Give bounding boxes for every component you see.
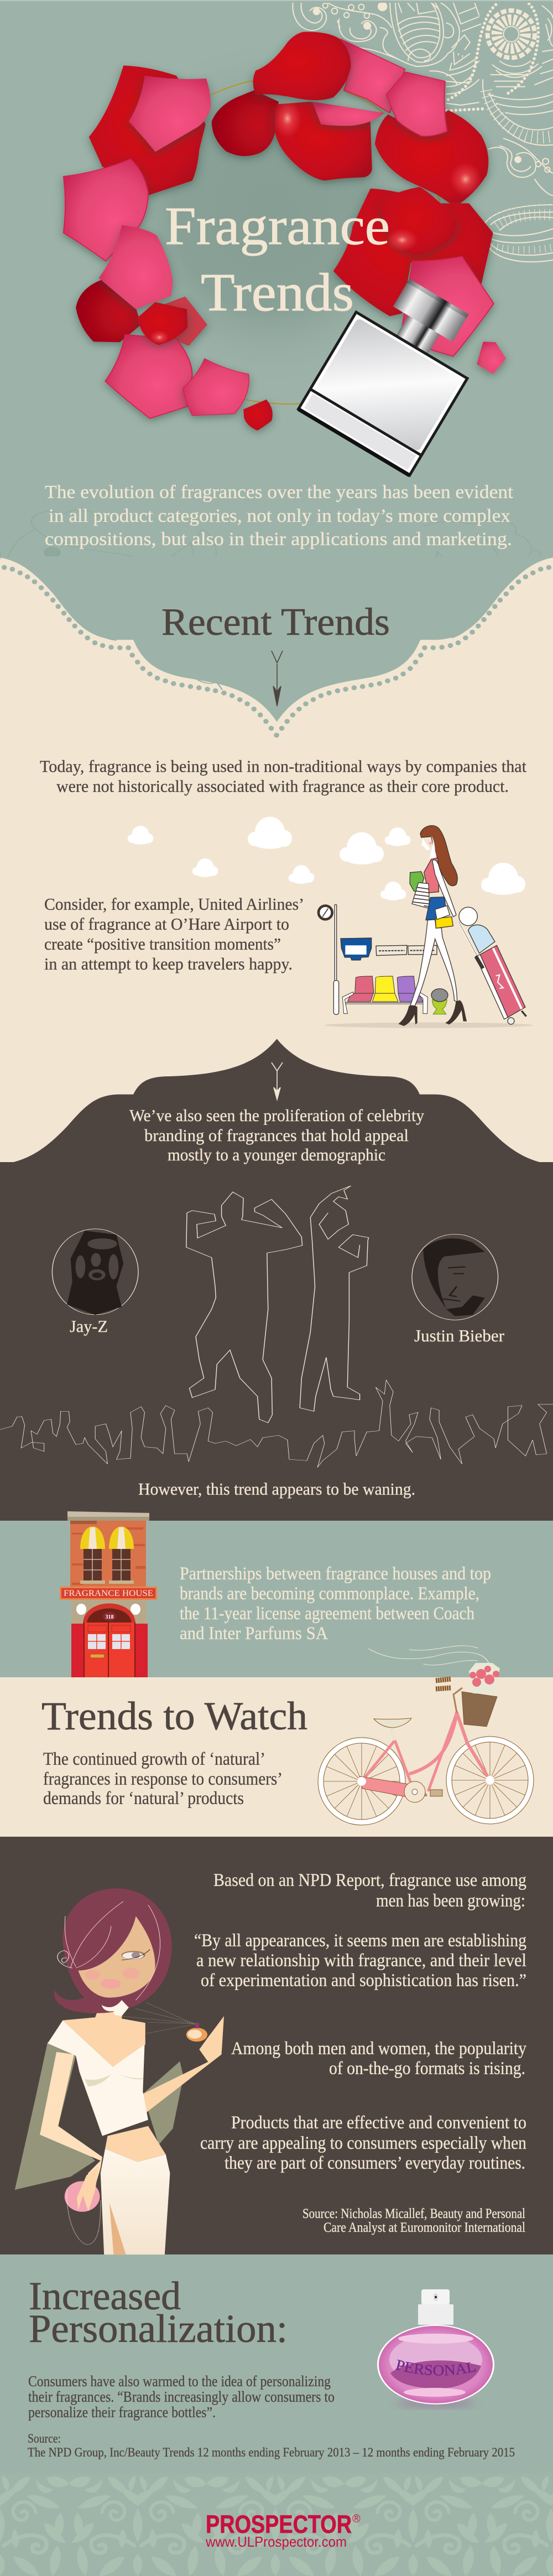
illustration: fragrance house	[60, 1511, 157, 1677]
petal: red right	[375, 110, 488, 206]
teal scalloped edge over cream	[0, 556, 553, 738]
skirt	[101, 2149, 170, 2254]
petal: pink lower right	[402, 256, 494, 356]
text: NPD report: men has been growing:	[376, 1891, 525, 1911]
flowers	[469, 1663, 500, 1694]
intro text: in all product categories, not only in today’s more complex	[49, 506, 510, 526]
petal: red top	[253, 32, 351, 100]
text: personalization: personalize their fragrance bottles”.	[28, 2404, 216, 2420]
petal: large red centre	[275, 102, 372, 181]
portrait: Jay-Z	[52, 1229, 138, 1315]
heading: Trends to Watch: Trends to Watch	[41, 1694, 307, 1738]
dotted border	[2, 565, 279, 738]
illustration: personal perfume bottle	[377, 2289, 494, 2410]
plant	[431, 989, 448, 1014]
airport clock and pole	[317, 905, 339, 1014]
text: men quote	[194, 1931, 526, 1991]
petal: dark red lower left	[76, 279, 141, 342]
background: teal hero	[0, 0, 553, 730]
dancer right	[300, 1186, 369, 1411]
text: source Micallef: Care Analyst at Euromonitor International	[324, 2220, 525, 2235]
arm	[432, 860, 456, 917]
text: source NPD	[28, 2432, 515, 2459]
text: partnerships	[180, 1564, 491, 1644]
eye	[121, 1950, 150, 1960]
arm right	[143, 2016, 224, 2112]
petal: pale red lower left	[162, 297, 207, 346]
text: united airlines: use of fragrance at O’Hare Airport to	[44, 914, 289, 934]
text: partnerships: and Inter Parfums SA	[180, 1624, 328, 1644]
text: today fragrance: were not historically associated with fragrance as their core product.	[56, 776, 509, 796]
petal: pink top centre	[312, 102, 384, 126]
house sign: FRAGRANCE HOUSE	[64, 1589, 153, 1598]
background: brown report section	[0, 1837, 553, 2254]
petal: pink bottom right	[182, 359, 249, 416]
text: celebrity branding: mostly to a younger demographic	[168, 1145, 385, 1164]
arm left	[40, 2052, 102, 2210]
petal: pink right	[386, 72, 447, 136]
text: source NPD: The NPD Group, Inc/Beauty Trends 12 months ending February 2013 – 12 months ending February 2015	[28, 2445, 515, 2459]
text: united airlines	[44, 894, 304, 973]
celebrity names: Jay-Z	[70, 1316, 108, 1336]
torso skin	[63, 2003, 145, 2067]
petal: pink top	[340, 39, 405, 113]
text: effective products: they are part of consumers’ everyday routines.	[225, 2153, 525, 2173]
text: natural fragrances: demands for ‘natural’ products	[43, 1789, 244, 1808]
house sign	[60, 1587, 157, 1600]
text: natural fragrances: fragrances in response to consumers’	[43, 1769, 283, 1789]
heading: Increased Personalization	[29, 2274, 288, 2351]
perfume bottle	[299, 264, 496, 475]
text: men quote: of experimentation and sophistication has risen.”	[201, 1971, 526, 1991]
hair	[420, 826, 457, 886]
background: cream section	[0, 557, 553, 1217]
background: cream trends section	[0, 1677, 553, 1837]
rose petal wreath	[64, 32, 506, 431]
title: Fragrance	[165, 196, 390, 256]
basket	[462, 1692, 497, 1727]
crowd	[0, 1380, 553, 1468]
petal: small pink right	[477, 341, 506, 374]
text: partnerships: the 11-year license agreement between Coach	[180, 1604, 474, 1624]
frame	[362, 1713, 490, 1792]
clouds	[128, 817, 525, 900]
text: source Micallef	[302, 2206, 525, 2235]
text: celebrity branding: branding of fragrances that hold appeal	[144, 1126, 409, 1145]
perfume atomizer	[186, 2023, 207, 2041]
yellow and white bags	[435, 917, 453, 928]
signs	[376, 945, 437, 956]
text: on-the-go formats: of on-the-go formats is rising.	[329, 2059, 525, 2079]
footer damask band	[0, 2474, 553, 2576]
petal: pink lower left mid	[99, 225, 173, 309]
breeze lines	[369, 1646, 488, 1665]
dancer outlines and crowd	[0, 1186, 553, 1468]
celebrity names: Justin Bieber	[414, 1326, 505, 1345]
bench	[342, 976, 427, 1014]
petal: dark red	[212, 90, 279, 156]
text: partnerships: Partnerships between fragrance houses and top	[180, 1564, 491, 1584]
petal: pink left	[64, 159, 148, 261]
lips	[101, 1979, 121, 1989]
green bag	[410, 872, 424, 893]
intro text: The evolution of fragrances over the years has been evident	[45, 482, 514, 502]
text: effective products: carry are appealing to consumers especially when	[200, 2133, 526, 2153]
logo: Prospector: ®	[352, 2513, 361, 2525]
arrow: down cream	[272, 1062, 283, 1100]
text: personalization: their fragrances. “Brands increasingly allow consumers to	[28, 2388, 335, 2405]
petal: pink upper left	[129, 76, 211, 152]
title	[165, 196, 390, 323]
face	[79, 1916, 155, 1998]
text: celebrity branding	[129, 1106, 424, 1164]
intro text: compositions, but also in their applications and marketing.	[45, 529, 512, 550]
logo: Prospector: www.ULProspector.com	[205, 2533, 347, 2550]
departures screen	[341, 938, 372, 960]
legs	[410, 920, 457, 1006]
top	[424, 858, 439, 893]
text: united airlines: Consider, for example, United Airlines’	[44, 894, 304, 914]
heading: Increased Personalization: Increased	[29, 2274, 181, 2318]
text: trend waning: However, this trend appears to be waning.	[138, 1479, 415, 1499]
text: NPD report	[213, 1870, 526, 1911]
heading: Increased Personalization: Personalization:	[29, 2307, 288, 2351]
petal: tiny red	[243, 400, 273, 431]
text: on-the-go formats: Among both men and women, the popularity	[231, 2039, 526, 2059]
celebrity names	[70, 1316, 505, 1345]
logo: Prospector	[205, 2510, 361, 2550]
text: united airlines: create “positive transition moments”	[44, 934, 281, 953]
centre shadow inside petal wreath	[94, 36, 448, 390]
illustration: fragrance house: 318	[105, 1614, 114, 1620]
illustration: woman with luggage at airport	[317, 826, 533, 1028]
text: personalization	[28, 2373, 335, 2420]
purse	[65, 2181, 101, 2245]
text: celebrity branding: We’ve also seen the proliferation of celebrity	[129, 1106, 424, 1125]
petal: small red	[138, 302, 187, 345]
arrow: down dark	[272, 651, 283, 706]
striped bag	[412, 883, 430, 909]
petal: red upper left	[89, 65, 206, 195]
saddle	[374, 1718, 411, 1728]
round bag	[459, 907, 477, 926]
suitcase	[459, 922, 526, 1024]
faint paisley background behind intro	[0, 510, 541, 706]
petal: pink bottom	[105, 335, 192, 418]
background: teal partnerships section	[0, 1521, 553, 1677]
face and neck	[421, 836, 437, 859]
dress top	[48, 2020, 148, 2136]
text: natural fragrances	[43, 1749, 283, 1808]
text: men quote: “By all appearances, it seems men are establishing	[194, 1931, 526, 1951]
illustration: personal perfume bottle: PERSONAL	[395, 2360, 476, 2376]
portrait: Justin Bieber	[412, 1234, 498, 1320]
text: NPD report: Based on an NPD Report, fragrance use among	[213, 1870, 526, 1890]
text: source NPD: Source:	[28, 2432, 61, 2445]
handlebars	[436, 1679, 451, 1689]
background: teal personalization section	[0, 2254, 553, 2474]
intro text	[45, 482, 514, 550]
text: effective products	[200, 2113, 526, 2173]
shorts	[426, 897, 446, 920]
hero paisley ornament	[293, 2, 553, 262]
text: personalization: Consumers have also warmed to the idea of personalizing	[28, 2373, 331, 2390]
text: effective products: Products that are effective and convenient to	[231, 2113, 526, 2133]
illustration: bicycle	[318, 1663, 534, 1825]
background: brown celebrity section	[0, 1039, 553, 1225]
spokes	[324, 1742, 528, 1820]
petal: red lower right front	[380, 187, 457, 256]
dancer left	[186, 1192, 302, 1423]
text: men quote: a new relationship with fragrance, and their level	[196, 1951, 526, 1971]
petal: red lower right back	[333, 189, 493, 316]
backpack	[468, 925, 495, 953]
text: today fragrance	[40, 756, 526, 796]
logo: Prospector: PROSPECTOR	[206, 2510, 352, 2538]
heels	[399, 1005, 417, 1025]
heading: Recent Trends: Recent Trends	[161, 601, 390, 644]
hair	[54, 1888, 172, 2013]
spray	[122, 2003, 195, 2034]
text: natural fragrances: The continued growth of ‘natural’	[43, 1749, 265, 1769]
text: united airlines: in an attempt to keep travelers happy.	[44, 954, 293, 973]
illustration: woman spraying perfume	[15, 1888, 224, 2254]
text: partnerships: brands are becoming commonplace. Example,	[180, 1584, 479, 1604]
text: today fragrance: Today, fragrance is being used in non-traditional ways by companies that	[40, 756, 526, 776]
text: on-the-go formats	[231, 2039, 526, 2079]
neck scarf	[102, 2000, 129, 2016]
title: Trends	[201, 263, 354, 323]
